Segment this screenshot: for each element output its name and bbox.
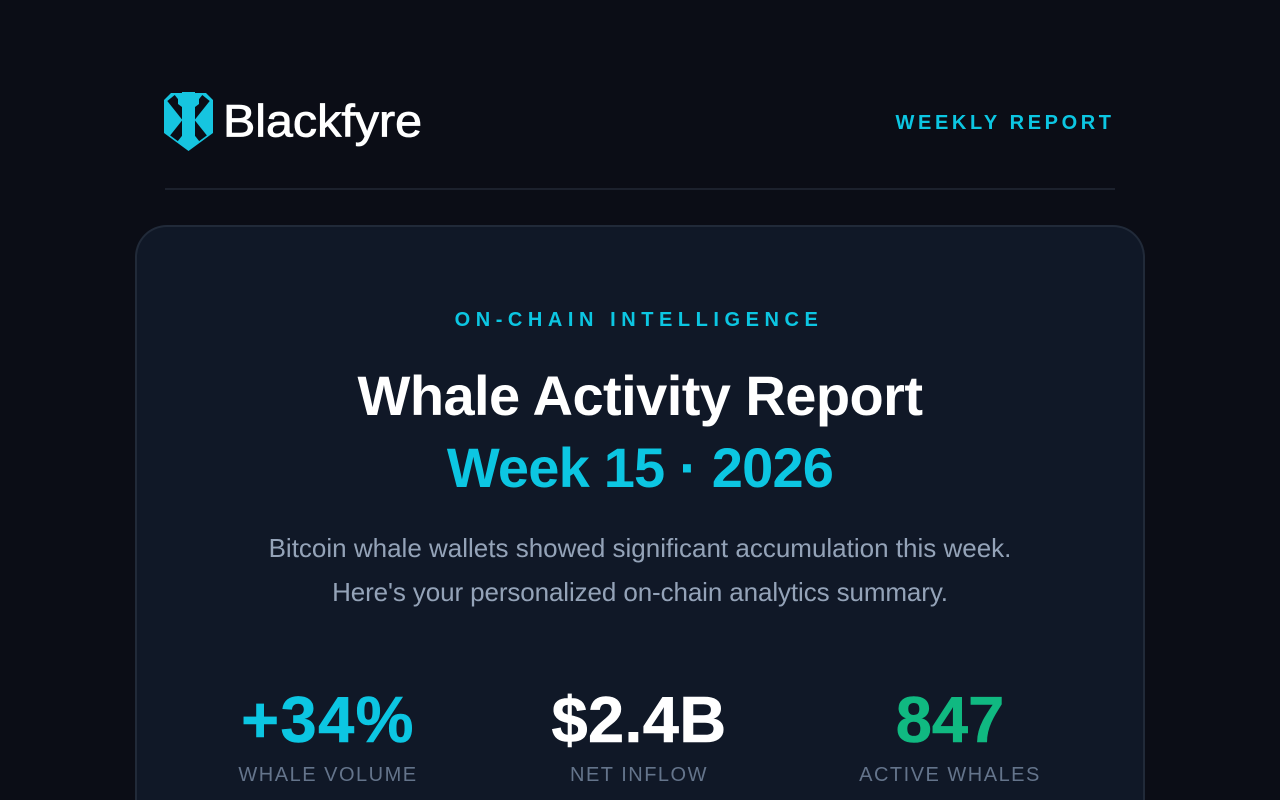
description: Bitcoin whale wallets showed significant accumulation this week. bbox=[269, 533, 1011, 563]
stat: net inflow bbox=[552, 683, 726, 786]
description: Here's your personalized on-chain analytics summary. bbox=[332, 577, 948, 607]
eyebrow: ON-CHAIN INTELLIGENCE bbox=[455, 309, 823, 331]
description bbox=[269, 533, 1011, 607]
stat value: 847 bbox=[896, 683, 1004, 756]
header bbox=[164, 92, 1115, 151]
stat: whale volume bbox=[238, 683, 418, 786]
stat label: NET INFLOW bbox=[570, 764, 708, 786]
report label: WEEKLY REPORT bbox=[896, 112, 1115, 134]
page background bbox=[135, 92, 1145, 800]
stat value: $2.4B bbox=[552, 683, 726, 756]
divider bbox=[165, 188, 1115, 190]
title: Week 15 · 2026 bbox=[447, 436, 833, 499]
wordmark: Blackfyre bbox=[223, 96, 422, 146]
icon: shield with sword bbox=[164, 92, 213, 151]
panel: main card bbox=[135, 225, 1145, 800]
logo bbox=[164, 92, 422, 151]
title bbox=[358, 364, 922, 499]
stat label: WHALE VOLUME bbox=[238, 764, 418, 786]
stat: active whales bbox=[859, 683, 1041, 786]
stat value: +34% bbox=[241, 683, 415, 756]
title: Whale Activity Report bbox=[358, 364, 922, 427]
stat label: ACTIVE WHALES bbox=[859, 764, 1041, 786]
